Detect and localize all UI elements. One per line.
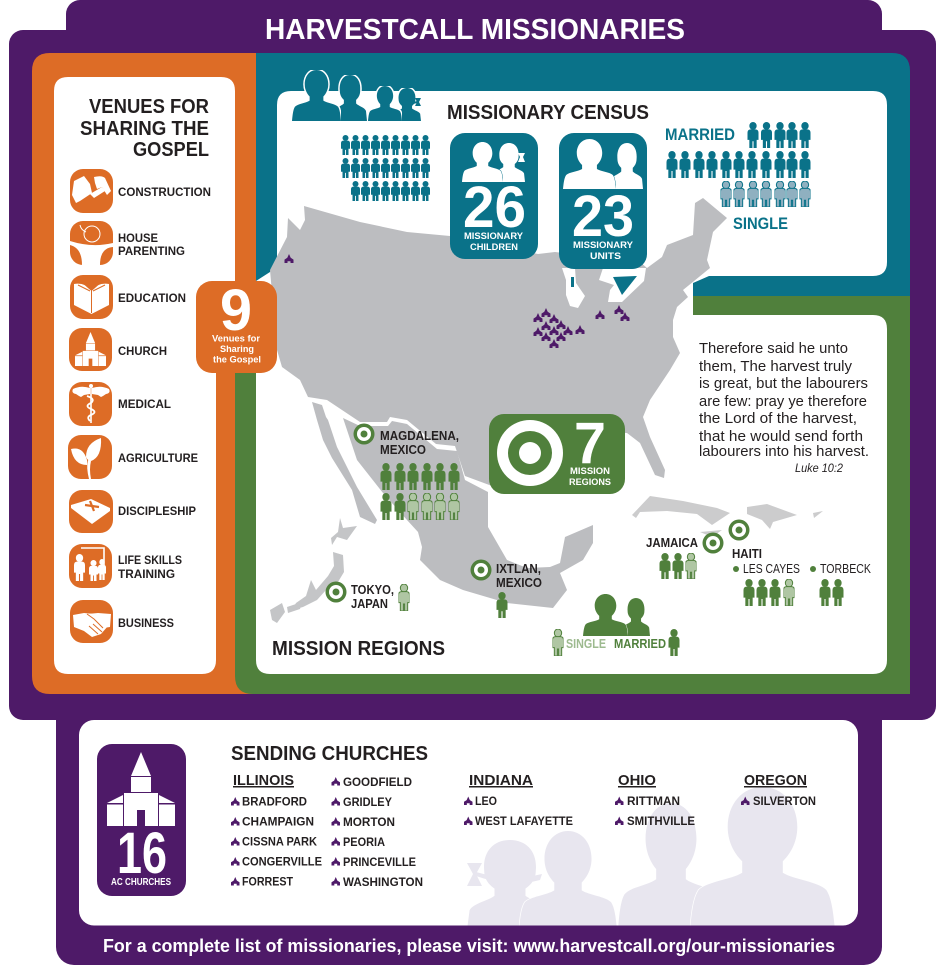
heading: mission regions: MISSION REGIONS	[272, 638, 445, 660]
icon: big people silhouettes	[292, 70, 421, 121]
legend: single and married: SINGLE	[566, 636, 606, 651]
map: church location markers	[284, 254, 630, 348]
list: Illinois churches: CISSNA PARK	[242, 834, 317, 848]
heading: missionary census: MISSIONARY CENSUS	[447, 102, 649, 124]
legend: single and married: MARRIED	[614, 636, 666, 651]
map: Caribbean islands	[632, 496, 823, 537]
list: Oregon churches	[741, 772, 816, 808]
region: Ixtlan, Mexico: IXTLAN,	[496, 562, 541, 576]
venue: life skills training	[69, 544, 182, 588]
venue: church: CHURCH	[118, 344, 167, 358]
region: Magdalena, Mexico: MEXICO	[380, 443, 426, 457]
region: Ixtlan, Mexico: MEXICO	[496, 576, 542, 590]
badge: 7 mission regions: REGIONS	[569, 477, 611, 488]
venue: business	[70, 600, 174, 643]
list: Illinois churches: BRADFORD	[242, 794, 307, 808]
pictogram: single missionaries	[720, 181, 810, 207]
region: Tokyo, Japan: TOKYO,	[351, 583, 394, 597]
heading: venues for sharing the gospel	[80, 96, 210, 161]
badge: 9 venues: Venues for	[212, 334, 260, 344]
badge: 26 missionary children: 26	[463, 175, 526, 240]
map: Japan	[270, 518, 357, 623]
badge: 26 missionary children	[450, 133, 538, 259]
list: Ohio churches: SMITHVILLE	[627, 814, 695, 828]
map: mainland Mexico and Central America	[343, 418, 593, 608]
list: Oregon churches: OREGON	[744, 772, 807, 789]
scripture quote: Therefore said he unto	[699, 341, 848, 357]
legend: single and married	[552, 594, 680, 656]
heading: sending churches: SENDING CHURCHES	[231, 743, 428, 765]
badge: 23 missionary units: 23	[572, 184, 634, 249]
region: Tokyo, Japan: JAPAN	[351, 597, 388, 611]
list: Indiana churches: LEO	[475, 794, 497, 808]
list: Illinois churches: FORREST	[242, 874, 294, 888]
region: Haiti: TORBECK	[820, 562, 872, 576]
badge: 23 missionary units: MISSIONARY	[573, 240, 634, 251]
region: Haiti: HAITI	[732, 547, 762, 561]
list: Illinois churches: ILLINOIS	[233, 772, 294, 789]
scripture quote: them, The harvest truly	[699, 359, 853, 375]
region: Haiti: LES CAYES	[743, 562, 800, 576]
list: Illinois churches: PRINCEVILLE	[343, 855, 416, 869]
list: Indiana churches: INDIANA	[469, 772, 533, 789]
venue: agriculture: AGRICULTURE	[118, 451, 198, 465]
scripture quote: Luke 10:2	[795, 463, 844, 475]
scripture quote: are few: pray ye therefore	[699, 394, 867, 410]
scripture quote: is great, but the labourers	[699, 376, 868, 392]
venue: construction	[70, 169, 211, 213]
venue: medical	[69, 382, 171, 426]
badge: 9 venues: Sharing	[220, 344, 254, 355]
badge: 7 mission regions	[489, 411, 625, 494]
ghost silhouettes	[467, 787, 835, 930]
venue: education	[70, 275, 186, 319]
region: Tokyo, Japan	[326, 582, 410, 611]
badge: 9 venues	[196, 278, 277, 373]
list: Illinois churches: MORTON	[343, 815, 395, 829]
legend: single label: SINGLE	[733, 214, 788, 233]
pictogram: married missionaries	[666, 122, 810, 178]
badge: 26 missionary children: CHILDREN	[470, 242, 518, 253]
list: Illinois churches: GRIDLEY	[343, 795, 392, 809]
map: Great Lakes	[562, 268, 646, 308]
badge: 7 mission regions: MISSION	[570, 466, 610, 477]
panel: coloured backgrounds	[32, 53, 910, 694]
venue: business: BUSINESS	[118, 616, 174, 630]
venue: house parenting	[70, 221, 185, 265]
venue: life skills training: TRAINING	[118, 567, 175, 581]
badge: 7 mission regions: 7	[574, 411, 606, 476]
heading: venues for sharing the gospel: VENUES FOR	[89, 96, 210, 118]
venue: education: EDUCATION	[118, 291, 186, 305]
region: Jamaica: JAMAICA	[646, 536, 698, 550]
list: Indiana churches	[464, 772, 573, 828]
list: Illinois churches: CONGERVILLE	[242, 854, 322, 868]
list: Ohio churches	[615, 772, 695, 828]
badge: 16 AC churches	[97, 744, 186, 896]
list: Illinois churches	[231, 772, 423, 889]
panel: census and regions white area	[256, 91, 887, 674]
panel: sending churches	[79, 720, 858, 926]
region: Haiti	[728, 520, 872, 606]
venue: medical: MEDICAL	[118, 397, 171, 411]
pictogram: 26 missionary children	[341, 135, 430, 201]
list: Ohio churches: RITTMAN	[627, 794, 680, 808]
venue: agriculture	[68, 435, 198, 479]
venue: life skills training: LIFE SKILLS	[118, 553, 182, 567]
venue: house parenting: HOUSE	[118, 231, 158, 245]
list: Illinois churches: WASHINGTON	[343, 875, 423, 889]
badge: 23 missionary units	[559, 133, 647, 269]
scripture quote: the Lord of the harvest,	[699, 411, 857, 427]
venue: construction: CONSTRUCTION	[118, 185, 211, 199]
venue: discipleship	[69, 490, 196, 533]
badge: 16 AC churches: 16	[117, 821, 167, 886]
region: Ixtlan, Mexico	[470, 560, 542, 618]
region: Magdalena, Mexico	[354, 424, 460, 520]
heading: venues for sharing the gospel: SHARING THE	[80, 118, 209, 140]
venue: discipleship: DISCIPLESHIP	[118, 504, 196, 518]
footer link text: For a complete list of missionaries, please visit: www.harvestcall.org/our-missionaries	[103, 936, 835, 956]
list: Illinois churches: GOODFIELD	[343, 775, 412, 789]
scripture quote: that he would send forth	[699, 429, 863, 445]
panel: venues white card	[54, 77, 235, 674]
badge: 9 venues: the Gospel	[213, 354, 261, 366]
scripture quote	[699, 341, 869, 475]
map: Baja California	[312, 402, 377, 524]
list: Illinois churches: PEORIA	[343, 835, 385, 849]
badge: 16 AC churches: AC CHURCHES	[111, 877, 171, 888]
venue: house parenting: PARENTING	[118, 244, 185, 258]
title: HARVESTCALL MISSIONARIES	[265, 14, 685, 46]
badge: 23 missionary units: UNITS	[590, 251, 621, 262]
list: Ohio churches: OHIO	[618, 772, 656, 789]
badge: 26 missionary children: MISSIONARY	[464, 231, 524, 242]
heading: venues for sharing the gospel: GOSPEL	[133, 139, 209, 161]
legend: married label: MARRIED	[665, 125, 735, 144]
list: Illinois churches: CHAMPAIGN	[242, 814, 314, 828]
list: Indiana churches: WEST LAFAYETTE	[475, 814, 573, 828]
region: Magdalena, Mexico: MAGDALENA,	[380, 429, 459, 443]
map: United States and Canada border	[270, 198, 727, 486]
scripture quote: labourers into his harvest.	[699, 444, 869, 460]
map: grey North America	[270, 198, 727, 608]
list: Oregon churches: SILVERTON	[753, 794, 816, 808]
region: Jamaica	[646, 532, 724, 579]
badge: 9 venues: 9	[220, 278, 252, 343]
venue: church	[69, 328, 167, 371]
